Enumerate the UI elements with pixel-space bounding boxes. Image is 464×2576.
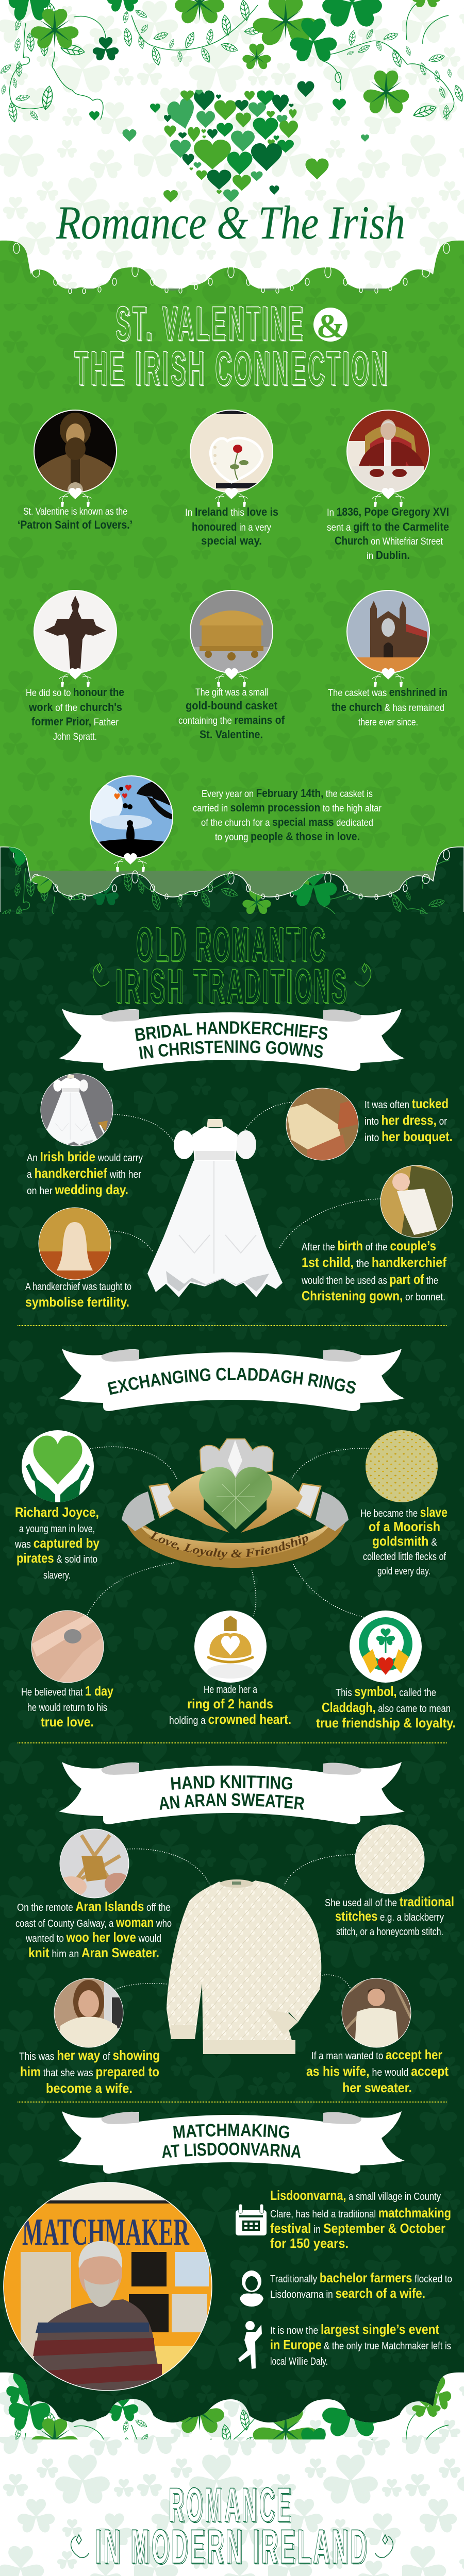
text: Lisdoonvarna festival: festival in September & October: [270, 2221, 445, 2236]
panel: St Valentine green section background: [0, 241, 464, 871]
text: slave of a Moorish goldsmith: He became the slave: [360, 1504, 448, 1520]
text: casket enshrined: The casket was enshrined in: [328, 686, 448, 699]
banner: matchmaking at Lisdoonvarna: [59, 2111, 405, 2174]
text: bachelor farmers: [270, 2270, 452, 2301]
text: accept her sweater: as his wife, he would accept: [306, 2063, 449, 2079]
text: slave of a Moorish goldsmith: collected little flecks of: [363, 1551, 446, 1563]
text: Ireland honours love: honoured in a very: [192, 520, 271, 533]
text: gold-bound casket: containing the remains of: [178, 714, 285, 726]
icon: heart ornament: [372, 488, 404, 507]
text: Irish bride handkerchief: on her wedding day.: [27, 1182, 128, 1197]
banner: bridal handkerchiefs: IN CHRISTENING GOWNS: [139, 1040, 323, 1059]
image: heart in hands: [22, 1430, 94, 1502]
text: Pope Gregory gift: Church on Whitefriar Street: [335, 534, 443, 547]
text: after birth of first child: Christening gown, or bonnet.: [302, 1288, 445, 1303]
text: Richard Joyce: a young man in love,: [19, 1523, 95, 1535]
text: honour the work: John Spratt.: [53, 732, 97, 742]
banner: bridal handkerchiefs: BRIDAL HANDKERCHIEFS: [135, 1021, 328, 1041]
text: accept her sweater: [306, 2047, 449, 2095]
panel: romance in modern Ireland white background: [0, 2372, 464, 2576]
text: February 14th procession: Every year on February 14th, the casket is: [202, 787, 373, 800]
text: honour the work: work of the church's: [28, 701, 122, 714]
text: February 14th procession: carried in solemn procession to the high altar: [193, 801, 382, 814]
text: after birth of first child: After the birth of the couple’s: [302, 1238, 436, 1253]
text: slave of a Moorish goldsmith: of a Moorish: [369, 1519, 440, 1534]
text: casket enshrined: [328, 686, 448, 728]
text: St Valentine patron saint: ‘Patron Saint of Lovers.’: [18, 518, 132, 531]
text: ring of 2 hands: He made her a: [204, 1684, 258, 1696]
text: slave of a Moorish goldsmith: gold every day.: [377, 1566, 430, 1577]
text: largest singles event: local Willie Daly.: [270, 2356, 328, 2367]
text: traditional stitches: She used all of the traditional: [325, 1894, 454, 1909]
text: tucked into dress: into her dress, or: [364, 1112, 447, 1128]
text: believed 1 day: true love.: [41, 1714, 94, 1730]
banner: matchmaking at Lisdoonvarna: AT LISDOONVARNA: [162, 2142, 301, 2158]
text: largest singles event: [270, 2321, 451, 2367]
text: accept her sweater: If a man wanted to accept her: [311, 2047, 442, 2062]
image: gold claddagh ring: [194, 1611, 267, 1683]
image: matchmaker portrait: MATCHMAKER: [22, 2211, 190, 2253]
text: Richard Joyce: pirates & sold into: [16, 1550, 97, 1566]
icon: calendar: [236, 2204, 267, 2235]
image: gown with handkerchief: [41, 1074, 113, 1149]
text: St Valentine patron saint: [18, 506, 132, 531]
text: believed 1 day: [21, 1683, 113, 1730]
text: Pope Gregory gift: In 1836, Pope Gregory XVI: [327, 505, 449, 518]
text: symbolise fertility: A handkerchief was taught to: [25, 1281, 131, 1293]
image: couple silhouette with balloons: [84, 776, 173, 858]
text: her way of showing him: him that she was prepared to: [20, 2064, 159, 2079]
text: after birth of first child: 1st child, the handkerchief: [302, 1255, 446, 1270]
icon: heart ornament: [59, 668, 91, 687]
text: Richard Joyce: [14, 1504, 100, 1581]
garland: dark section shamrocks and vines: [2, 847, 450, 914]
text: bachelor farmers: Traditionally bachelor farmers flocked to: [270, 2270, 452, 2285]
text: St Valentine patron saint: St. Valentine is known as the: [23, 506, 127, 517]
heading: romance in modern Ireland: ROMANCE: [169, 2478, 293, 2532]
image: ring on finger: [31, 1611, 104, 1683]
text: Lisdoonvarna festival: for 150 years.: [270, 2235, 349, 2251]
text: symbolise fertility: symbolise fertility.: [25, 1294, 129, 1310]
text: tucked into dress: It was often tucked: [364, 1096, 449, 1111]
text: Lisdoonvarna festival: Lisdoonvarna, a small village in County: [270, 2188, 441, 2203]
text: bachelor farmers: Lisdoonvarna in search of a wife.: [270, 2285, 425, 2301]
banner: hand knitting an Aran sweater: HAND KNITTING: [171, 1775, 292, 1790]
text: February 14th procession: of the church for a special mass dedicated: [201, 816, 373, 828]
text: Lisdoonvarna festival: [270, 2188, 451, 2251]
text: slave of a Moorish goldsmith: [360, 1504, 448, 1577]
text: honour the work: He did so to honour the: [26, 686, 124, 699]
image: claddagh emblem: [350, 1611, 422, 1683]
text: Pope Gregory gift: in Dublin.: [367, 549, 410, 562]
text: symbol called the Claddagh: Claddagh, also came to mean: [322, 1700, 451, 1715]
text: traditional stitches: [325, 1894, 454, 1938]
text: Aran Islands: [15, 1899, 172, 1960]
arrows: dotted connectors to sweater: [115, 1849, 355, 1989]
image: gold flecks: [366, 1430, 438, 1502]
text: ring of 2 hands: holding a crowned heart.: [169, 1711, 291, 1727]
text: Ireland honours love: special way.: [201, 534, 262, 547]
text: ring of 2 hands: ring of 2 hands: [187, 1696, 273, 1711]
icon: woman bust: [240, 2270, 263, 2307]
text: her way of showing him: become a wife.: [46, 2080, 132, 2096]
image: hands with lace: [286, 1088, 358, 1160]
text: symbol called the Claddagh: This symbol, called the: [336, 1684, 436, 1699]
panel: old romantic traditions dark background: [0, 847, 464, 2432]
text: traditional stitches: stitches e.g. a blackberry: [335, 1908, 444, 1924]
text: after birth of first child: would then be used as part of the: [301, 1272, 438, 1287]
image: Carmelite church: [347, 590, 429, 673]
text: Pope Gregory gift: sent a gift to the Carmelite: [327, 520, 449, 533]
banner: hand knitting an Aran sweater: AN ARAN SWEATER: [160, 1793, 304, 1810]
text: casket enshrined: the church & has remained: [332, 701, 444, 714]
arrows: dotted connectors to ring: [87, 1447, 369, 1617]
text: tucked into dress: [364, 1096, 453, 1144]
text: after birth of first child: [301, 1238, 446, 1303]
text: Richard Joyce: slavery.: [43, 1570, 71, 1581]
text: February 14th procession: [193, 787, 382, 843]
text: February 14th procession: to young people & those in love.: [215, 830, 360, 843]
text: Richard Joyce: Richard Joyce,: [15, 1504, 99, 1520]
text: gold-bound casket: St. Valentine.: [200, 728, 263, 741]
text: gold-bound casket: gold-bound casket: [186, 699, 278, 712]
icon: heart ornament: [59, 488, 91, 507]
image: claddagh ring: Love, Loyalty & Friendship: [150, 1531, 308, 1560]
arrows: dotted connectors to gown: [109, 1102, 380, 1251]
text: gold-bound casket: The gift was a small: [195, 687, 268, 698]
heading: St Valentine and the Irish connection: [74, 296, 389, 395]
icon: walking figure: [238, 2321, 262, 2369]
icon: heart ornament: [216, 668, 247, 687]
image: embroidered handkerchief: [190, 410, 273, 493]
image: cable stitch detail: [355, 1825, 424, 1894]
text: Richard Joyce: was captured by: [14, 1535, 100, 1551]
text: tucked into dress: into her bouquet.: [364, 1129, 453, 1144]
image: Pope Gregory portrait: [347, 410, 429, 497]
title: Romance & The Irish: [56, 196, 405, 249]
banner: bridal handkerchiefs: [59, 1009, 405, 1071]
white intro background: [0, 0, 464, 289]
image: St Valentine portrait: [34, 410, 117, 498]
text: Irish bride handkerchief: [27, 1149, 143, 1197]
text: Irish bride handkerchief: a handkerchief with her: [27, 1165, 141, 1181]
heading: romance in modern Ireland: [71, 2478, 393, 2573]
text: symbol called the Claddagh: [316, 1684, 456, 1731]
text: believed 1 day: he would return to his: [27, 1702, 107, 1714]
icon: heart ornament: [372, 668, 404, 687]
icon: heart ornament: [114, 853, 146, 872]
image: claddagh ring: [122, 1438, 349, 1568]
image: man in sweater: [342, 1978, 411, 2047]
text: honour the work: former Prior, Father: [31, 715, 119, 728]
banner: matchmaking at Lisdoonvarna: MATCHMAKING: [173, 2124, 289, 2139]
image: crochet bell: [39, 1208, 111, 1280]
text: Aran Islands: wanted to woo her love would: [25, 1929, 161, 1945]
text: symbolise fertility: [25, 1281, 131, 1310]
text: Aran Islands: knit him an Aran Sweater.: [28, 1945, 159, 1960]
text: Irish bride handkerchief: An Irish bride would carry: [27, 1149, 143, 1164]
icon: heart ornament: [216, 488, 247, 507]
text: ring of 2 hands: [169, 1684, 291, 1727]
text: believed 1 day: He believed that 1 day: [21, 1683, 113, 1699]
text: Lisdoonvarna festival: Clare, has held a traditional matchmaking: [270, 2205, 451, 2221]
text: gold-bound casket: [178, 687, 285, 741]
image: woman in sweater: [54, 1978, 125, 2047]
garland: top shamrocks and vines: [0, 0, 464, 123]
text: accept her sweater: her sweater.: [342, 2080, 412, 2095]
garland: lower shamrocks and vines: [6, 2373, 452, 2439]
image: baby in christening gown: [380, 1165, 453, 1238]
image: cream Aran sweater: [167, 1879, 321, 2054]
text: largest singles event: It is now the largest single’s event: [270, 2321, 439, 2337]
image: gold casket: [190, 590, 273, 673]
text: casket enshrined: there ever since.: [358, 717, 418, 728]
text: Ireland honours love: [185, 505, 278, 547]
text: her way of showing him: This was her way of showing: [19, 2047, 160, 2063]
text: Pope Gregory gift: [327, 505, 449, 562]
image: matchmaker portrait: [4, 2182, 212, 2391]
text: honour the work: [26, 686, 124, 742]
text: Aran Islands: coast of County Galway, a woman who: [15, 1914, 172, 1930]
image: iron cross: [34, 590, 117, 673]
text: her way of showing him: [19, 2047, 160, 2096]
banner: hand knitting an Aran sweater: [59, 1762, 405, 1824]
image: hands knitting: [56, 1829, 130, 1898]
text: slave of a Moorish goldsmith: goldsmith &: [372, 1533, 438, 1549]
banner: exchanging claddagh rings: EXCHANGING CLADDAGH RINGS: [107, 1367, 356, 1395]
banner: exchanging claddagh rings: [59, 1349, 405, 1411]
heading: old romantic Irish traditions: [93, 917, 371, 1013]
heading: St Valentine and the Irish connection: &: [317, 308, 344, 345]
heart collage: [123, 81, 369, 202]
image: christening gown: [147, 1119, 283, 1297]
text: Ireland honours love: In Ireland this love is: [185, 505, 278, 518]
text: Aran Islands: On the remote Aran Islands off the: [17, 1899, 171, 1914]
